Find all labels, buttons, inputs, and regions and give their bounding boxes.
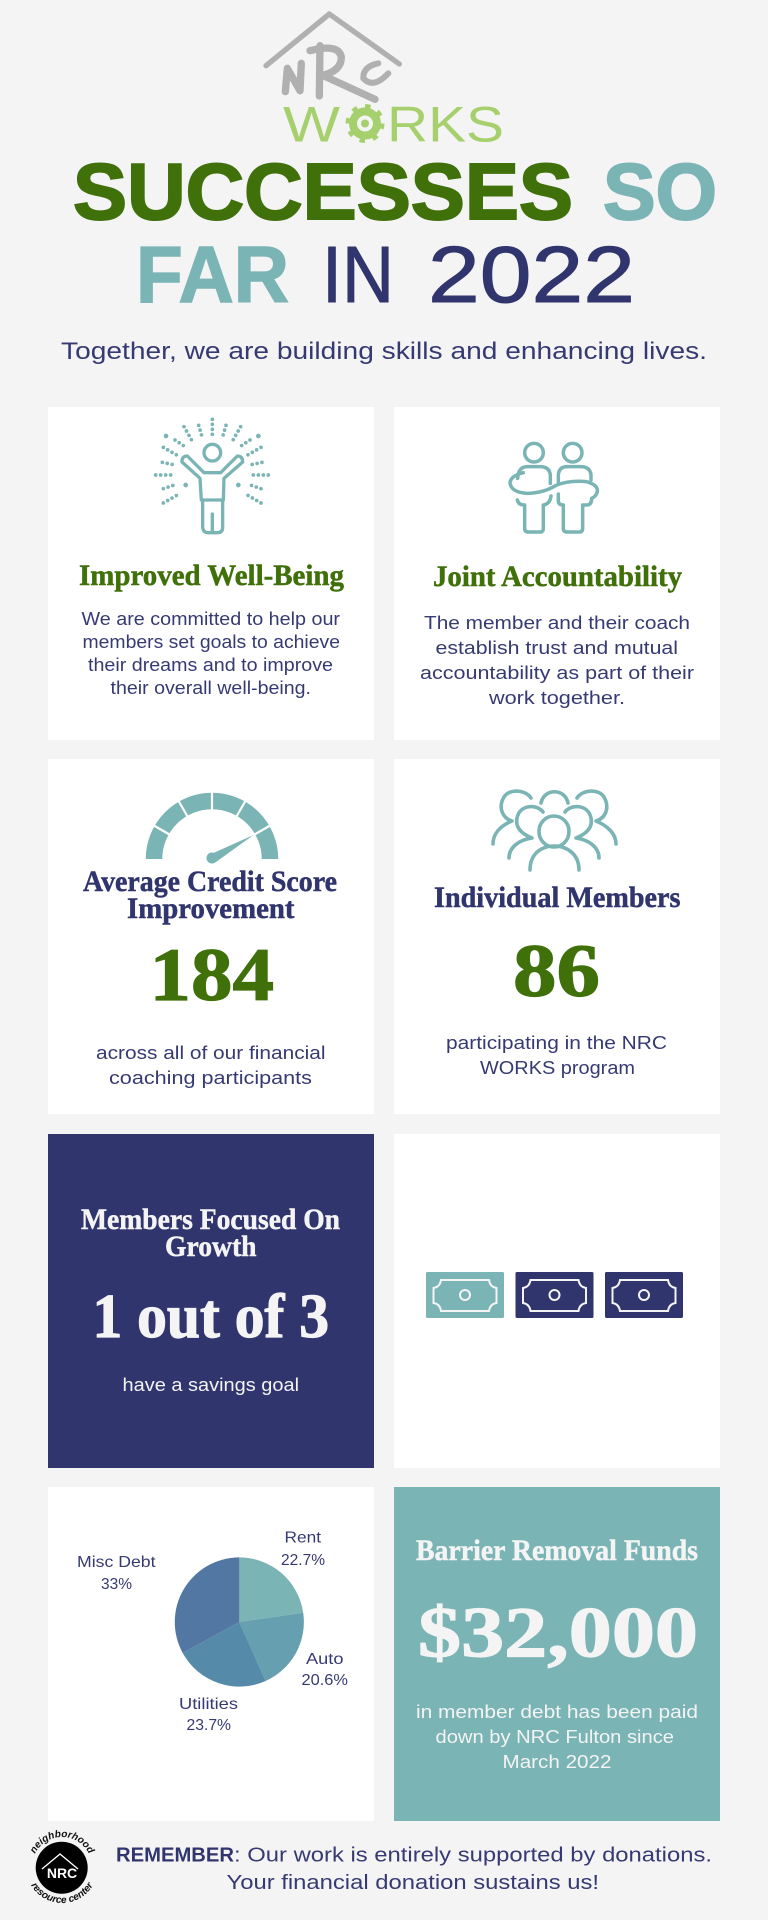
label: auto bbox=[302, 1651, 348, 1689]
panel: members focused on growth bbox=[48, 1134, 374, 1468]
body text bbox=[446, 1033, 667, 1078]
label: utilities: 23.7% bbox=[186, 1717, 231, 1734]
heading: Joint Accountability bbox=[433, 560, 682, 593]
title: IN bbox=[322, 230, 394, 319]
heading: Average Credit Score bbox=[83, 865, 337, 898]
heading: Individual Members bbox=[434, 881, 680, 914]
title: SO bbox=[603, 147, 717, 236]
title bbox=[73, 147, 717, 319]
body text: across all of our financial bbox=[96, 1043, 326, 1063]
body text: The member and their coach bbox=[424, 613, 690, 633]
logo: neighborhood resource center bbox=[31, 1830, 96, 1904]
heading bbox=[83, 865, 337, 925]
label: auto: Auto bbox=[306, 1651, 344, 1668]
panel: barrier removal funds bbox=[394, 1487, 720, 1821]
logo: neighborhood resource center: resource center bbox=[31, 1882, 92, 1904]
logo: NRC Works: RKS bbox=[387, 96, 504, 152]
body text bbox=[96, 1043, 326, 1088]
title: FAR bbox=[136, 230, 289, 319]
label: misc debt bbox=[77, 1554, 156, 1593]
stat: $32,000: $32,000 bbox=[418, 1592, 698, 1672]
body text: their dreams and to improve bbox=[88, 655, 333, 675]
logo: NRC Works: W bbox=[283, 96, 341, 152]
heading: Improvement bbox=[127, 892, 295, 925]
body text: members set goals to achieve bbox=[82, 632, 340, 652]
logo: neighborhood resource center: neighborhood bbox=[31, 1830, 96, 1854]
label: rent: 22.7% bbox=[281, 1552, 325, 1569]
label: utilities: Utilities bbox=[179, 1696, 238, 1713]
icon: two people joined by a ribbon bbox=[510, 443, 597, 532]
body text: establish trust and mutual bbox=[436, 638, 678, 658]
body text: accountability as part of their bbox=[420, 663, 694, 683]
title: 2022 bbox=[428, 230, 635, 319]
heading: Barrier Removal Funds bbox=[416, 1534, 698, 1567]
body text bbox=[82, 609, 340, 698]
body text bbox=[420, 613, 694, 708]
logo: NRC Works bbox=[266, 14, 504, 153]
panel: joint accountability bbox=[394, 407, 720, 740]
label: misc debt: Misc Debt bbox=[77, 1554, 156, 1571]
label: misc debt: 33% bbox=[101, 1576, 132, 1593]
body text: work together. bbox=[488, 688, 625, 708]
label: auto: 20.6% bbox=[302, 1672, 348, 1689]
icon: navy bill bbox=[605, 1272, 683, 1318]
body text: WORKS program bbox=[480, 1058, 635, 1078]
heading: Members Focused On bbox=[81, 1203, 340, 1236]
panel: individual members bbox=[394, 759, 720, 1114]
body text: participating in the NRC bbox=[446, 1033, 667, 1053]
panel: debt pie chart bbox=[48, 1487, 374, 1821]
body text bbox=[416, 1702, 698, 1772]
body text: coaching participants bbox=[109, 1068, 312, 1088]
stat: 86: 86 bbox=[513, 930, 600, 1013]
body text: their overall well-being. bbox=[110, 678, 311, 698]
footer message: : Our work is entirely supported by donations. bbox=[234, 1844, 712, 1866]
label: rent: Rent bbox=[284, 1530, 322, 1546]
body text: We are committed to help our bbox=[82, 609, 340, 629]
icon: group of people bbox=[493, 791, 616, 870]
footer message bbox=[116, 1844, 712, 1894]
tagline: Together, we are building skills and enhancing lives. bbox=[61, 338, 707, 365]
label: rent bbox=[281, 1530, 325, 1569]
panel: dollar bills pictogram bbox=[394, 1134, 720, 1468]
panel: improved well-being bbox=[48, 407, 374, 740]
icon: gauge bbox=[146, 783, 278, 864]
body text: in member debt has been paid bbox=[416, 1702, 698, 1722]
body text: have a savings goal bbox=[122, 1375, 299, 1395]
icon: navy bill bbox=[516, 1272, 594, 1318]
logo: neighborhood resource center: NRC bbox=[47, 1865, 77, 1881]
panel: average credit score improvement bbox=[48, 759, 374, 1114]
body text: down by NRC Fulton since bbox=[436, 1727, 674, 1747]
icon: teal bill bbox=[426, 1272, 504, 1318]
footer message: REMEMBER bbox=[116, 1844, 235, 1866]
heading: Improved Well-Being bbox=[79, 559, 344, 592]
body text: March 2022 bbox=[502, 1752, 612, 1772]
label: utilities bbox=[179, 1696, 238, 1734]
stat: 184: 184 bbox=[150, 934, 274, 1017]
heading bbox=[81, 1203, 340, 1263]
stat: 1 out of 3: 1 out of 3 bbox=[92, 1283, 329, 1351]
icon: person with raised arms and radiating dots bbox=[156, 419, 268, 533]
footer message: Your financial donation sustains us! bbox=[226, 1872, 599, 1894]
heading: Growth bbox=[165, 1230, 257, 1263]
title: SUCCESSES bbox=[73, 147, 573, 236]
pie chart bbox=[175, 1557, 304, 1687]
